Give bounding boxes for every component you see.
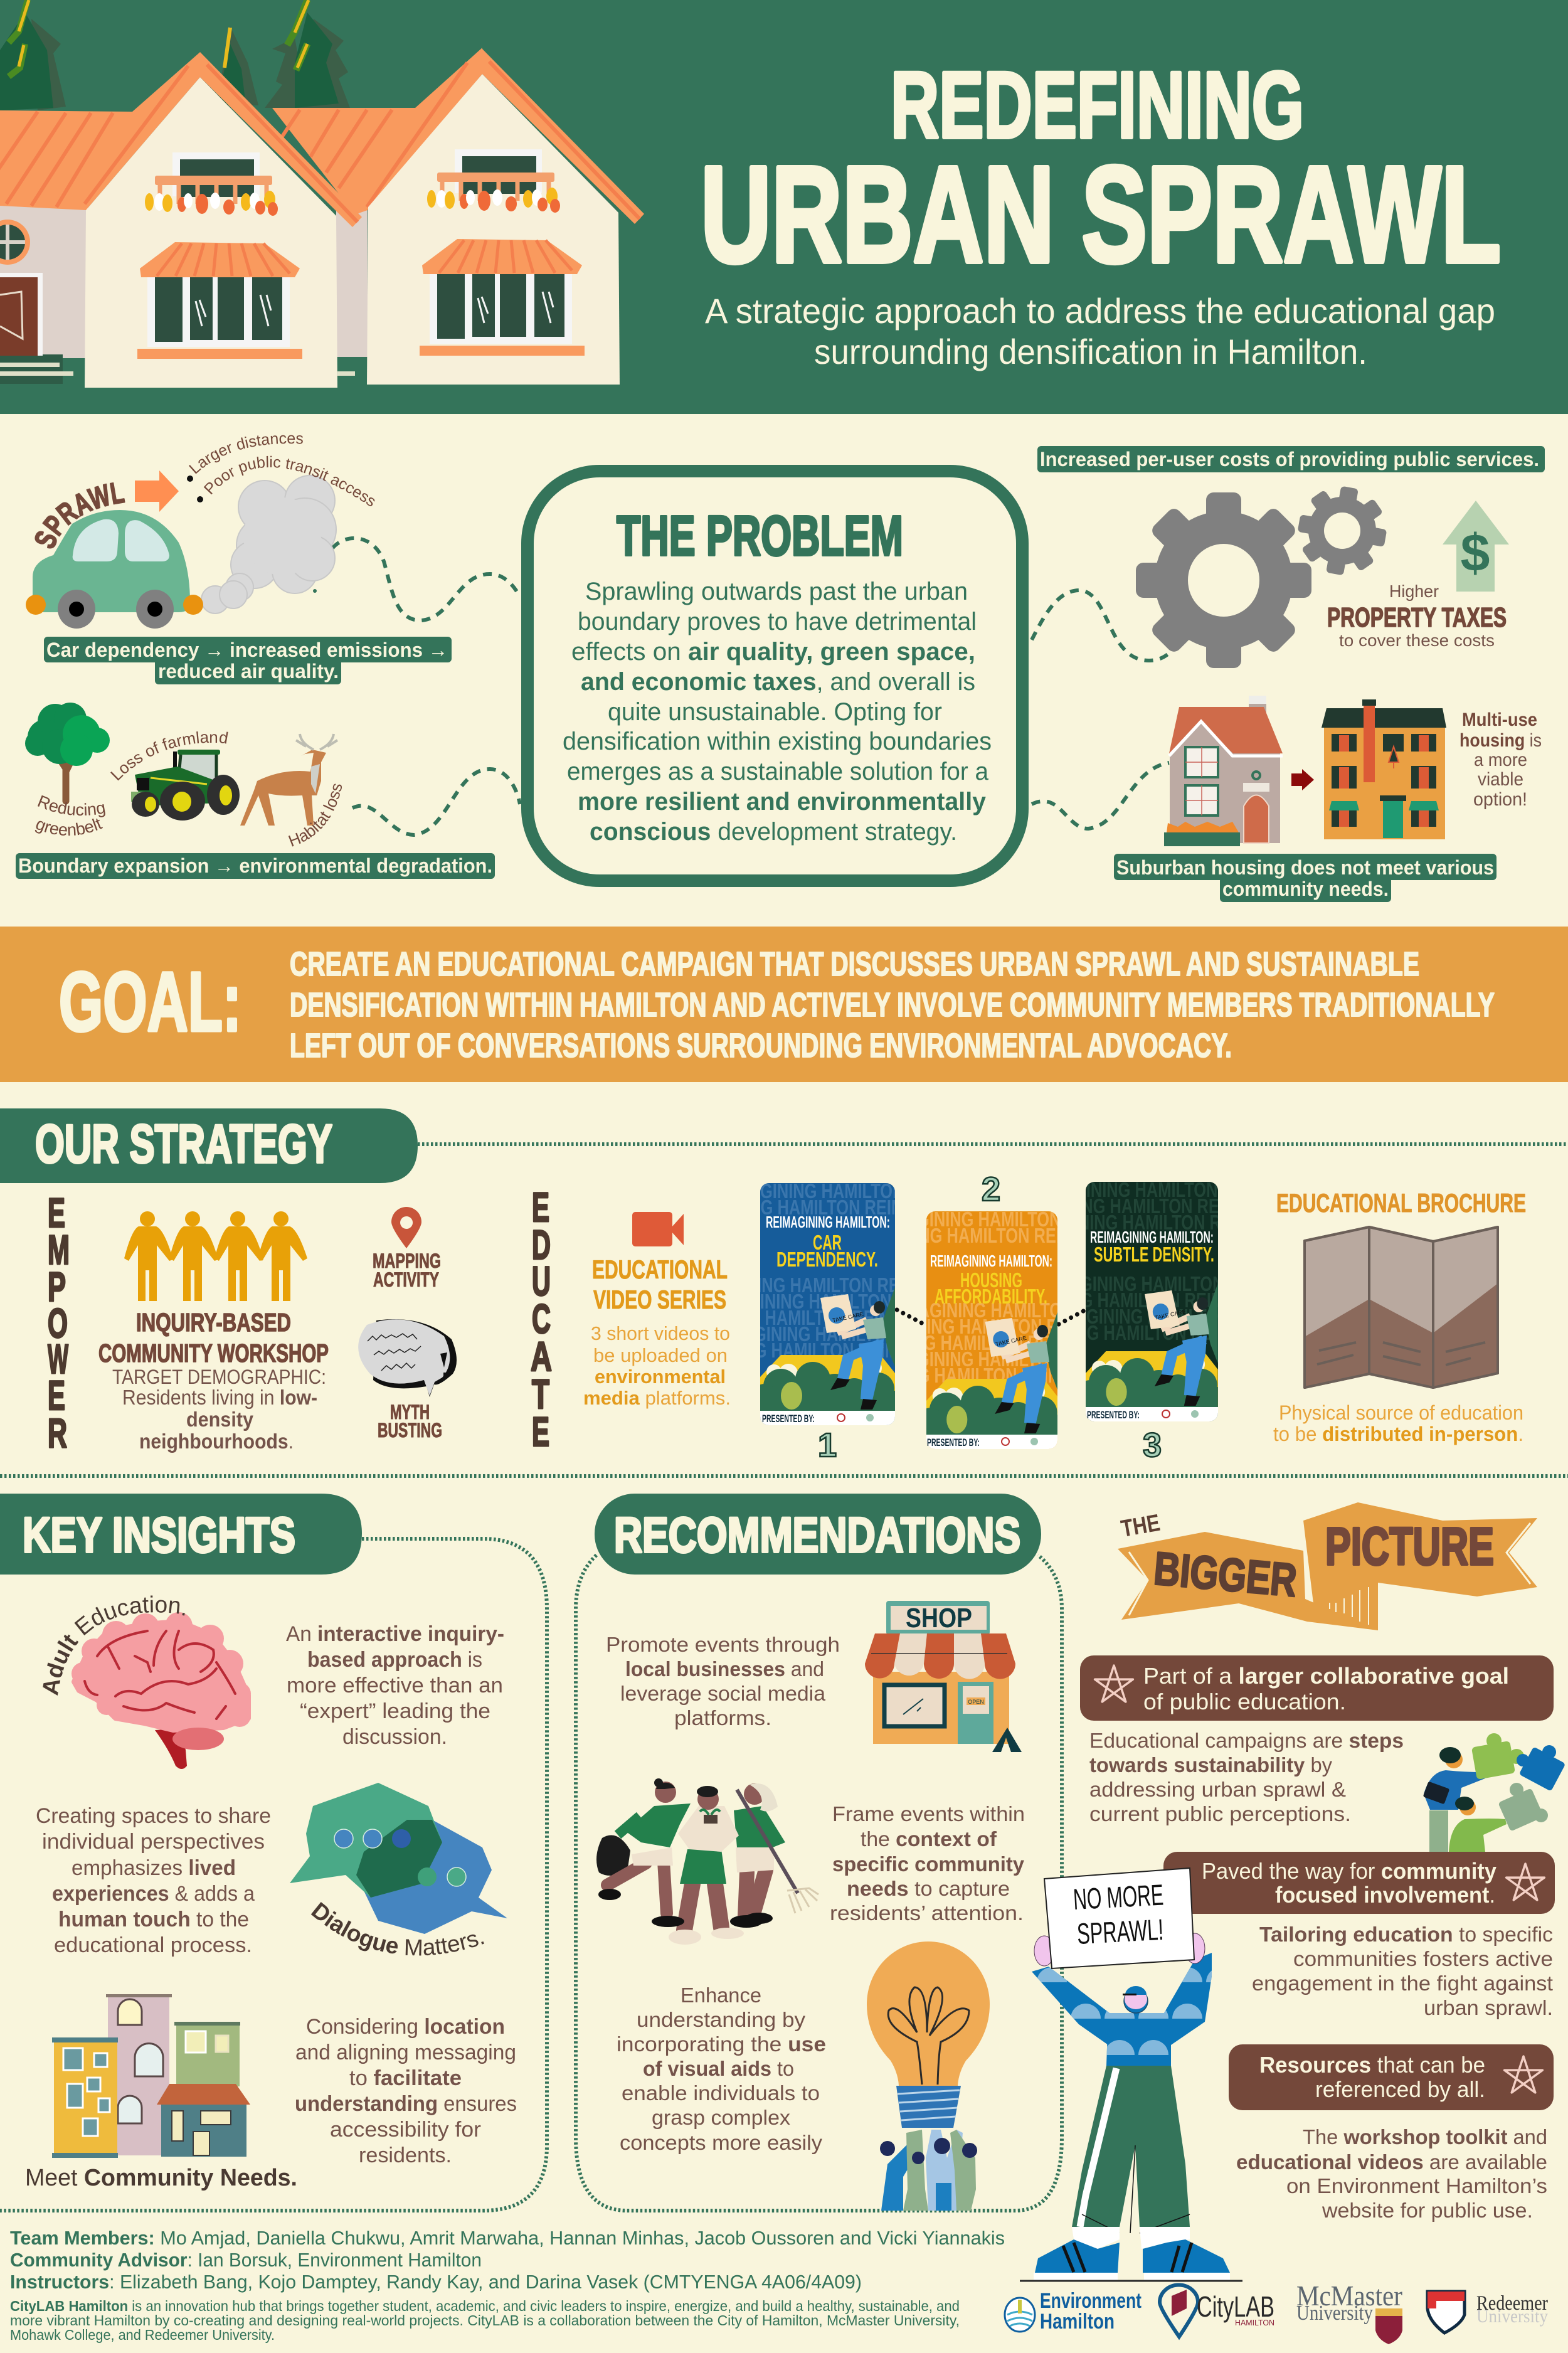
logo: mcmaster <box>1296 2280 1402 2344</box>
subtitle <box>705 291 1495 371</box>
text: visual aids: Enhance <box>681 1984 761 2007</box>
title: REDEFINING <box>891 52 1304 157</box>
text: higher property taxes: Higher <box>1389 582 1439 601</box>
icon: rising dollar arrow: $ <box>1461 523 1490 582</box>
banner heading: PICTURE <box>1325 1517 1494 1576</box>
icon: speech bubbles <box>290 1783 507 1934</box>
icon: tractor <box>131 750 240 821</box>
connector dots between video cards <box>897 1310 1086 1325</box>
text: lived experiences: experiences & adds a <box>52 1882 255 1906</box>
text: brochure description: to be distributed in-person. <box>1273 1423 1523 1445</box>
callout: collaborative goal: of public education. <box>1143 1689 1346 1714</box>
text: educational video series: 3 short videos to <box>591 1322 730 1344</box>
illustration: light bulb with people <box>867 1941 990 2211</box>
vertical word: educate: T <box>532 1371 549 1417</box>
icon: four people holding hands <box>124 1211 307 1301</box>
video card 1: CAR <box>813 1231 842 1254</box>
vertical word: educate: E <box>532 1184 549 1230</box>
credits: team: Team Members: Mo Amjad, Daniella Chukwu, Amrit Marwaha, Hannan Minhas, Jacob Oussoren and Vicki Yiannakis <box>10 2227 1005 2249</box>
text: steps towards sustainability: current public perceptions. <box>1089 1802 1351 1825</box>
video card 3: REIMAGINING HAMILTON REIMAGINING HAMILTON <box>991 1321 1386 1344</box>
text: tailoring education: Tailoring education to specific <box>1259 1923 1553 1946</box>
protest sign: SPRAWL! <box>1076 1913 1164 1950</box>
icon: red arrow <box>1291 769 1314 790</box>
protest sign <box>1044 1868 1194 1968</box>
credits: team <box>10 2227 1005 2293</box>
vertical word: empower: M <box>48 1226 70 1273</box>
curved labels: greenbelt: greenbelt <box>35 818 103 836</box>
curved labels: farmland and habitat: Habitat loss <box>289 784 342 847</box>
problem body text: more resilient and environmentally <box>578 788 987 815</box>
banner heading: THE <box>1119 1510 1162 1543</box>
text: location messaging: and aligning messaging <box>295 2041 516 2064</box>
video card 1: REIMAGINING HAMILTON REIMAGINING HAMILTON <box>702 1322 1098 1346</box>
problem body text: emerges as a sustainable solution for a <box>567 758 989 785</box>
curved labels: farmland and habitat: Loss of farmland <box>110 731 228 780</box>
problem body text: densification within existing boundaries <box>563 728 992 755</box>
text: location messaging: to facilitate <box>349 2066 462 2090</box>
text: mapping activity: MAPPING <box>373 1250 441 1272</box>
icon: shop: SHOP <box>906 1603 972 1633</box>
text: tailoring education: urban sprawl. <box>1424 1996 1553 2019</box>
text: local businesses: leverage social media <box>620 1682 826 1705</box>
video card 3: REIMAGINING HAMILTON REIMAGINING HAMILTON <box>1010 1211 1405 1234</box>
logo: mcmaster: McMaster <box>1296 2280 1402 2312</box>
text: educational video series: VIDEO SERIES <box>593 1285 726 1314</box>
text: visual aids: incorporating the use <box>617 2032 826 2056</box>
text: community needs context: the context of <box>861 1827 997 1851</box>
heading: key insights: KEY INSIGHTS <box>23 1507 295 1563</box>
text: visual aids: enable individuals to <box>622 2081 820 2105</box>
problem body text: conscious development strategy. <box>590 818 957 846</box>
icon: shop <box>865 1601 1022 1752</box>
video card 1: TAKE CARE <box>832 1311 864 1324</box>
text: multi-use housing <box>1459 709 1542 810</box>
curved labels: farmland and habitat <box>110 731 342 847</box>
icon: myth speech bubble <box>358 1319 457 1397</box>
text: multi-use housing: viable <box>1478 769 1523 790</box>
icon: rising dollar arrow <box>1443 501 1509 592</box>
text: lived experiences: individual perspectives <box>42 1830 265 1854</box>
illustration: row of houses <box>0 48 644 388</box>
vertical word: empower <box>48 1189 70 1456</box>
text: workshop toolkit: website for public use. <box>1322 2199 1533 2222</box>
video card 3: REIMAGINING HAMILTON: <box>1090 1228 1214 1246</box>
text: interactive approach: “expert” leading the <box>300 1699 490 1723</box>
video card 1: REIMAGINING HAMILTON REIMAGINING HAMILTON <box>665 1196 1060 1219</box>
credits: citylab description: Mohawk College, and Redeemer University. <box>10 2327 275 2343</box>
logo: mcmaster: University <box>1296 2302 1373 2325</box>
vertical word: empower: W <box>48 1336 68 1382</box>
text: interactive approach: An interactive inquiry- <box>286 1622 504 1646</box>
card numbers: 3 <box>1143 1426 1162 1464</box>
text: inquiry-based community workshop: TARGET DEMOGRAPHIC: <box>112 1366 326 1388</box>
vertical word: empower: P <box>48 1263 66 1310</box>
video card 2: REIMAGINING HAMILTON REIMAGINING HAMILTON <box>828 1331 1223 1354</box>
label: suburban housing: community needs. <box>1222 878 1389 900</box>
problem body text: and economic taxes, and overall is <box>581 668 975 696</box>
icon: community buildings <box>52 1994 250 2158</box>
label: car dependency: Car dependency → increased emissions → <box>46 639 448 661</box>
text: location messaging: Considering location <box>306 2015 505 2039</box>
connector: problem to gears <box>1032 590 1172 661</box>
vertical word: empower: O <box>48 1300 68 1346</box>
text: visual aids: concepts more easily <box>620 2131 823 2154</box>
sprawl consequences: Poor public transit access <box>203 455 375 506</box>
curved title: adult education: Adult Education. <box>43 1596 185 1696</box>
video card 1: REIMAGINING HAMILTON REIMAGINING HAMILTON <box>709 1179 1104 1203</box>
text: local businesses: local businesses and <box>625 1657 824 1681</box>
text: brochure description <box>1273 1401 1523 1445</box>
text: steps towards sustainability <box>1089 1729 1404 1825</box>
text: local businesses <box>606 1633 840 1729</box>
header panel <box>0 0 1568 414</box>
connector: greenbelt to problem <box>352 769 520 835</box>
text: tailoring education <box>1252 1923 1553 2019</box>
callout: resources: Resources that can be <box>1259 2052 1485 2078</box>
text: interactive approach: based approach is <box>307 1648 482 1672</box>
vertical word: empower: E <box>48 1189 65 1236</box>
heading: our strategy: OUR STRATEGY <box>35 1114 332 1174</box>
curved label: sprawl: SPRAWL <box>34 482 125 548</box>
text: visual aids <box>617 1984 826 2154</box>
callout: collaborative goal: Part of a larger collaborative goal <box>1143 1663 1509 1689</box>
video card 3: SUBTLE DENSITY. <box>1094 1243 1214 1266</box>
heading: recommendations <box>595 1494 1041 1575</box>
text: myth busting: BUSTING <box>378 1419 442 1442</box>
logo: citylab <box>1160 2285 1274 2337</box>
video card 2: AFFORDABILITY. <box>935 1285 1047 1308</box>
label: boundary expansion: Boundary expansion → environmental degradation. <box>18 854 492 877</box>
goal statement: LEFT OUT OF CONVERSATIONS SURROUNDING ENVIRONMENTAL ADVOCACY. <box>290 1027 1232 1065</box>
text: community needs context: residents’ attention. <box>830 1901 1024 1925</box>
vertical word: educate: A <box>531 1333 552 1379</box>
text: multi-use housing: option! <box>1473 789 1527 810</box>
logo: environment hamilton <box>1005 2289 1142 2334</box>
problem body text: boundary proves to have detrimental <box>578 608 977 635</box>
text: visual aids: grasp complex <box>652 2106 791 2129</box>
card numbers: 1 <box>818 1426 837 1464</box>
video card 2: TAKE CARE <box>995 1335 1027 1347</box>
subtitle: surrounding densification in Hamilton. <box>814 332 1367 371</box>
text: educational video series: be uploaded on <box>593 1344 728 1366</box>
icon: deer <box>240 734 337 826</box>
text: location messaging: residents. <box>359 2143 452 2167</box>
sprawl consequences: Larger distances <box>189 435 303 474</box>
text: myth busting <box>378 1401 442 1442</box>
text: community needs context: specific community <box>832 1852 1025 1876</box>
credits: citylab description <box>10 2298 960 2343</box>
video card 2: HOUSING <box>960 1268 1022 1292</box>
text: higher property taxes <box>1327 582 1507 650</box>
label: car dependency: reduced air quality. <box>158 660 339 683</box>
callout: collaborative goal <box>1080 1655 1554 1721</box>
icon: suburban house <box>1164 696 1283 846</box>
heading: our strategy <box>0 1108 418 1183</box>
icon: shop: OPEN <box>968 1699 984 1705</box>
text: workshop toolkit: The workshop toolkit and <box>1303 2125 1547 2149</box>
callout: community involvement: focused involvement. <box>1275 1882 1495 1908</box>
credits: team: Instructors: Elizabeth Bang, Kojo Damptey, Randy Kay, and Darina Vasek (CMTYENGA 4A06/4A09) <box>10 2271 862 2293</box>
illustration: pine trees <box>0 0 350 110</box>
text: lived experiences: educational process. <box>54 1933 252 1957</box>
text: lived experiences <box>36 1804 271 1957</box>
heading: key insights <box>0 1494 362 1575</box>
video card 3: REIMAGINING HAMILTON REIMAGINING HAMILTON <box>1029 1272 1424 1295</box>
text: location messaging <box>295 2015 517 2167</box>
logo: citylab: HAMILTON <box>1235 2318 1274 2327</box>
callout: resources <box>1229 2044 1554 2110</box>
logo: environment hamilton: Hamilton <box>1040 2310 1115 2334</box>
vertical word: educate: C <box>532 1295 551 1342</box>
video card 2: REIMAGINING HAMILTON REIMAGINING HAMILTON <box>834 1224 1229 1247</box>
subtitle: A strategic approach to address the educational gap <box>705 291 1495 331</box>
text: location messaging: understanding ensures <box>295 2092 517 2116</box>
icon: big gear <box>1136 492 1311 668</box>
text: educational video series: EDUCATIONAL <box>592 1255 728 1284</box>
connector: problem to housing <box>1032 763 1169 829</box>
video card 3: REIMAGINING HAMILTON REIMAGINING HAMILTON <box>1022 1178 1417 1201</box>
icon: small gear <box>1298 486 1387 575</box>
text: multi-use housing: Multi-use <box>1462 709 1537 730</box>
text: inquiry-based community workshop: neighbourhoods. <box>139 1430 294 1453</box>
video card 1: REIMAGINING HAMILTON REIMAGINING HAMILTON <box>652 1306 1047 1329</box>
problem body text: effects on air quality, green space, <box>571 638 975 666</box>
text: lived experiences: human touch to the <box>58 1908 249 1931</box>
vertical word: educate <box>531 1184 552 1455</box>
text: educational video series <box>583 1255 731 1409</box>
heading: recommendations: RECOMMENDATIONS <box>614 1507 1020 1563</box>
text: steps towards sustainability: addressing urban sprawl & <box>1089 1778 1346 1801</box>
text: inquiry-based community workshop: INQUIRY-BASED <box>136 1308 291 1337</box>
text: tailoring education: communities fosters active <box>1293 1947 1553 1970</box>
credits: citylab description: CityLAB Hamilton is an innovation hub that brings together student, academic, and civic leaders to inspire, energize, and build a healthy, sustainable, and <box>10 2298 960 2314</box>
panel: our strategy <box>0 1108 1568 1476</box>
label: suburban housing: Suburban housing does not meet various <box>1116 856 1494 879</box>
text: interactive approach: discussion. <box>342 1725 447 1749</box>
text: mapping activity: ACTIVITY <box>373 1268 439 1291</box>
curved title: dialogue matters: Dialogue Matters. <box>311 1902 484 1956</box>
text: lived experiences: emphasizes lived <box>72 1856 236 1880</box>
video card 3: REIMAGINING HAMILTON REIMAGINING HAMILTON <box>1035 1305 1430 1328</box>
video card 1: DEPENDENCY. <box>776 1248 878 1271</box>
sprawl consequences <box>187 435 375 506</box>
text: mapping activity <box>373 1250 441 1291</box>
problem body text: Sprawling outwards past the urban <box>585 578 968 605</box>
problem body text <box>563 578 992 846</box>
icon: car with exhaust <box>26 475 336 629</box>
curved labels: greenbelt: Reducing <box>38 795 105 817</box>
text: brochure description: Physical source of education <box>1279 1401 1523 1424</box>
panel: key insights <box>0 1494 549 2212</box>
text: local businesses: platforms. <box>674 1706 771 1729</box>
vertical word: educate: E <box>532 1408 549 1455</box>
text: multi-use housing: a more <box>1474 750 1527 770</box>
text: visual aids: understanding by <box>637 2008 806 2031</box>
illustration: person holding protest sign <box>1020 1868 1242 2281</box>
label: car dependency <box>44 637 452 684</box>
logo: citylab: CityLAB <box>1197 2290 1274 2323</box>
icon: map pin <box>391 1207 421 1248</box>
text: steps towards sustainability: towards sustainability by <box>1089 1753 1332 1777</box>
label: suburban housing <box>1114 854 1496 902</box>
text: visual aids: of visual aids to <box>643 2057 794 2080</box>
text: inquiry-based community workshop: density <box>186 1408 254 1431</box>
video card 2: REIMAGINING HAMILTON REIMAGINING HAMILTON <box>866 1208 1261 1231</box>
illustration: three community volunteers <box>596 1778 818 1945</box>
icon: tree <box>25 703 110 801</box>
text: inquiry-based community workshop: Residents living in low- <box>122 1386 317 1409</box>
text: community needs context <box>830 1802 1025 1925</box>
text: community needs context: Frame events within <box>832 1802 1025 1825</box>
video card 1: REIMAGINING HAMILTON REIMAGINING HAMILTON <box>677 1273 1073 1297</box>
text: meet community needs: Meet Community Needs. <box>25 2165 297 2191</box>
video card 2: REIMAGINING HAMILTON REIMAGINING HAMILTON <box>878 1299 1273 1322</box>
video card 1: REIMAGINING HAMILTON REIMAGINING HAMILTON <box>696 1290 1091 1313</box>
logo: environment hamilton: Environment <box>1040 2289 1142 2313</box>
video card 3: REIMAGINING HAMILTON REIMAGINING HAMILTON <box>985 1288 1380 1312</box>
banner heading: BIGGER <box>1152 1542 1299 1607</box>
connector: car to problem <box>332 538 520 620</box>
text: local businesses: Promote events through <box>606 1633 840 1656</box>
text: community needs context: needs to capture <box>847 1877 1010 1900</box>
text: multi-use housing: housing is <box>1459 730 1542 751</box>
video card 2: REIMAGINING HAMILTON REIMAGINING HAMILTON <box>822 1364 1217 1387</box>
panel: the bigger picture <box>1080 1502 1565 2222</box>
text: workshop toolkit: on Environment Hamilton’s <box>1286 2174 1547 2197</box>
video card 2: REIMAGINING HAMILTON REIMAGINING HAMILTON <box>847 1315 1242 1338</box>
vertical word: empower: R <box>48 1410 67 1456</box>
video card 2: REIMAGINING HAMILTON: <box>930 1251 1052 1270</box>
text: interactive approach: more effective than an <box>287 1674 503 1697</box>
text: educational video series: environmental <box>595 1366 726 1388</box>
text: myth busting: MYTH <box>390 1401 430 1423</box>
card numbers: 2 <box>982 1171 1000 1208</box>
video card 3: REIMAGINING HAMILTON REIMAGINING HAMILTON <box>997 1194 1392 1218</box>
vertical word: educate: D <box>532 1221 551 1268</box>
icon: folded brochure <box>1305 1227 1498 1388</box>
credits: citylab description: more vibrant Hamilton by co-creating and designing real-world projects. CityLAB is a collaboration between the City of Hamilton, McMaster University, <box>10 2312 960 2329</box>
icon: brain <box>72 1612 251 1769</box>
protest sign: NO MORE <box>1073 1878 1164 1916</box>
panel: goal <box>0 927 1568 1082</box>
goal statement <box>290 945 1495 1065</box>
video card 2: PRESENTED BY: <box>927 1437 980 1448</box>
panel: the problem <box>527 471 1022 881</box>
video card 1: REIMAGINING HAMILTON REIMAGINING HAMILTON <box>659 1339 1054 1362</box>
label: public services cost: Increased per-user costs of providing public services. <box>1040 448 1539 470</box>
illustration: people with puzzle pieces <box>1423 1733 1565 1852</box>
panel: recommendations <box>576 1494 1062 2211</box>
text: workshop toolkit: educational videos are available <box>1236 2150 1547 2174</box>
video card 3: TAKE CARE <box>1154 1309 1187 1321</box>
icon: video camera <box>632 1212 684 1246</box>
banner heading <box>1118 1502 1537 1630</box>
problem body text: quite unsustainable. Opting for <box>608 698 942 726</box>
vertical word: empower: E <box>48 1372 65 1418</box>
goal heading: GOAL: <box>59 955 241 1049</box>
icon: multi-use building <box>1322 699 1446 839</box>
text: inquiry-based community workshop: COMMUNITY WORKSHOP <box>98 1339 329 1368</box>
curved labels: greenbelt <box>35 795 105 836</box>
credits: team: Community Advisor: Ian Borsuk, Environment Hamilton <box>10 2249 482 2271</box>
text: lived experiences: Creating spaces to share <box>36 1804 271 1828</box>
callout: community involvement <box>1163 1852 1555 1914</box>
text: educational video series: media platforms. <box>583 1387 731 1409</box>
text: inquiry-based community workshop <box>98 1308 329 1453</box>
icon: orange arrow <box>135 470 179 512</box>
callout: community involvement: Paved the way for community <box>1202 1858 1496 1884</box>
text: steps towards sustainability: Educational campaigns are steps <box>1089 1729 1404 1752</box>
video card 1: REIMAGINING HAMILTON: <box>766 1213 890 1231</box>
logo: redeemer: Redeemer <box>1476 2292 1548 2315</box>
heading: the problem: THE PROBLEM <box>617 505 903 568</box>
card numbers <box>818 1171 1162 1464</box>
video card 2: REIMAGINING HAMILTON REIMAGINING HAMILTON <box>866 1347 1261 1371</box>
video card 3 <box>1086 1182 1218 1421</box>
text: higher property taxes: to cover these costs <box>1339 631 1495 650</box>
vertical word: educate: U <box>532 1258 551 1304</box>
logo: redeemer: University <box>1476 2306 1548 2327</box>
video card 2 <box>926 1211 1057 1449</box>
callout: resources: referenced by all. <box>1315 2076 1485 2102</box>
title <box>701 52 1501 291</box>
video card 1 <box>760 1183 895 1425</box>
logo: redeemer <box>1428 2292 1548 2333</box>
text: location messaging: accessibility for <box>330 2118 481 2142</box>
video card 1: PRESENTED BY: <box>762 1413 815 1425</box>
text: tailoring education: engagement in the fight against <box>1252 1972 1553 1995</box>
text: interactive approach <box>286 1622 504 1749</box>
text: workshop toolkit <box>1236 2125 1547 2222</box>
video card 3: PRESENTED BY: <box>1087 1409 1140 1421</box>
